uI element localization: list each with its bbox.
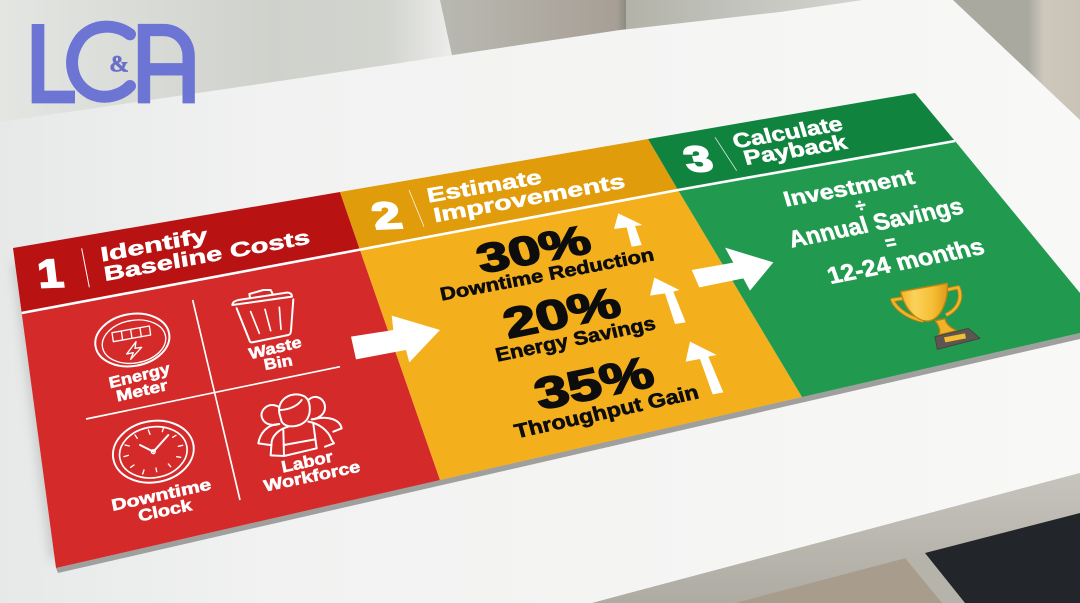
panel: step 3 calculate payback: [648, 93, 1080, 397]
grid dividers: [86, 300, 340, 500]
panel body red: [22, 250, 440, 568]
formula text: 12-24 months: [824, 233, 988, 289]
label: labor workforce: [262, 448, 362, 496]
heading: estimate improvements: Estimate: [425, 167, 544, 208]
panel header red: [13, 192, 360, 313]
heading: calculate payback: Calculate: [730, 113, 845, 153]
formula text: =: [882, 231, 899, 253]
logo: LC&A: [38, 24, 189, 103]
heading: estimate improvements: [425, 167, 627, 227]
heading: identify baseline costs: [99, 224, 311, 286]
label: labor workforce: Labor: [280, 448, 335, 477]
label: downtime clock: Clock: [137, 496, 195, 526]
board edge thickness: [56, 333, 1080, 573]
panel: step 2 estimate improvements: [340, 139, 802, 480]
logo letter L: [38, 24, 75, 97]
label: labor workforce: Workforce: [262, 458, 362, 496]
arrow: step 1 to step 2: [351, 316, 440, 362]
header divider: [82, 248, 89, 287]
icon: waste bin: [232, 290, 293, 342]
label: downtime clock: [110, 475, 213, 526]
stat: 35% throughput gain: 35%: [529, 348, 660, 420]
label: waste bin: Waste: [247, 334, 303, 363]
arrow: up 2: [650, 278, 686, 324]
step 3 content: [679, 113, 988, 349]
step 1 content: [35, 224, 362, 526]
step number 2: 2: [368, 195, 406, 238]
icon: downtime clock: [108, 414, 199, 489]
panel: step 1 identify baseline costs: [13, 192, 440, 568]
logo ampersand: &: [109, 51, 129, 77]
background: table front edge and floor: [592, 473, 1080, 603]
stat: 35% throughput gain: [512, 348, 701, 443]
heading: calculate payback: Payback: [741, 131, 850, 170]
panel body amber: [360, 190, 802, 480]
step number 3: 3: [679, 138, 717, 179]
stat: 20% energy savings: Energy Savings: [493, 313, 658, 367]
panel body green: [678, 141, 1080, 397]
stat: 35% throughput gain: Throughput Gain: [512, 382, 701, 443]
stat: 20% energy savings: [493, 279, 658, 367]
formula text: Investment: [780, 165, 917, 212]
label: downtime clock: Downtime: [110, 475, 213, 515]
header divider: [409, 190, 424, 227]
label: waste bin: [247, 334, 303, 374]
label: energy meter: [107, 360, 172, 406]
stat: 20% energy savings: 20%: [497, 279, 626, 347]
stat: 30% downtime reduction: 30%: [471, 216, 596, 282]
header rule line: [22, 141, 955, 313]
formula text: ÷: [852, 194, 868, 216]
step number 1: 1: [35, 252, 66, 296]
step 2 content: [351, 167, 773, 443]
panel header amber: [340, 139, 678, 250]
heading: identify baseline costs: Baseline Costs: [102, 227, 311, 286]
label: energy meter: Meter: [115, 377, 169, 406]
arrow: up 3: [686, 342, 723, 394]
heading: calculate payback: [730, 113, 850, 170]
heading: estimate improvements: Improvements: [432, 171, 627, 227]
label: energy meter: Energy: [107, 360, 172, 392]
logo letter A: [144, 30, 189, 103]
stat: 30% downtime reduction: [438, 216, 656, 305]
formula text: [780, 165, 988, 289]
header divider: [715, 137, 737, 171]
logo letter C: [72, 27, 130, 97]
panel header green: [648, 93, 955, 190]
icon: trophy: [892, 283, 980, 349]
icon: labor workforce: [258, 394, 342, 456]
formula text: Annual Savings: [785, 193, 967, 252]
stat: 30% downtime reduction: Downtime Reduction: [438, 243, 656, 305]
board shadow: [12, 262, 400, 560]
label: waste bin: Bin: [262, 352, 294, 374]
arrow: step 2 to step 3: [692, 248, 773, 291]
icon: energy meter: [91, 308, 174, 372]
arrow: up 1: [614, 213, 642, 247]
heading: identify baseline costs: Identify: [99, 224, 210, 267]
